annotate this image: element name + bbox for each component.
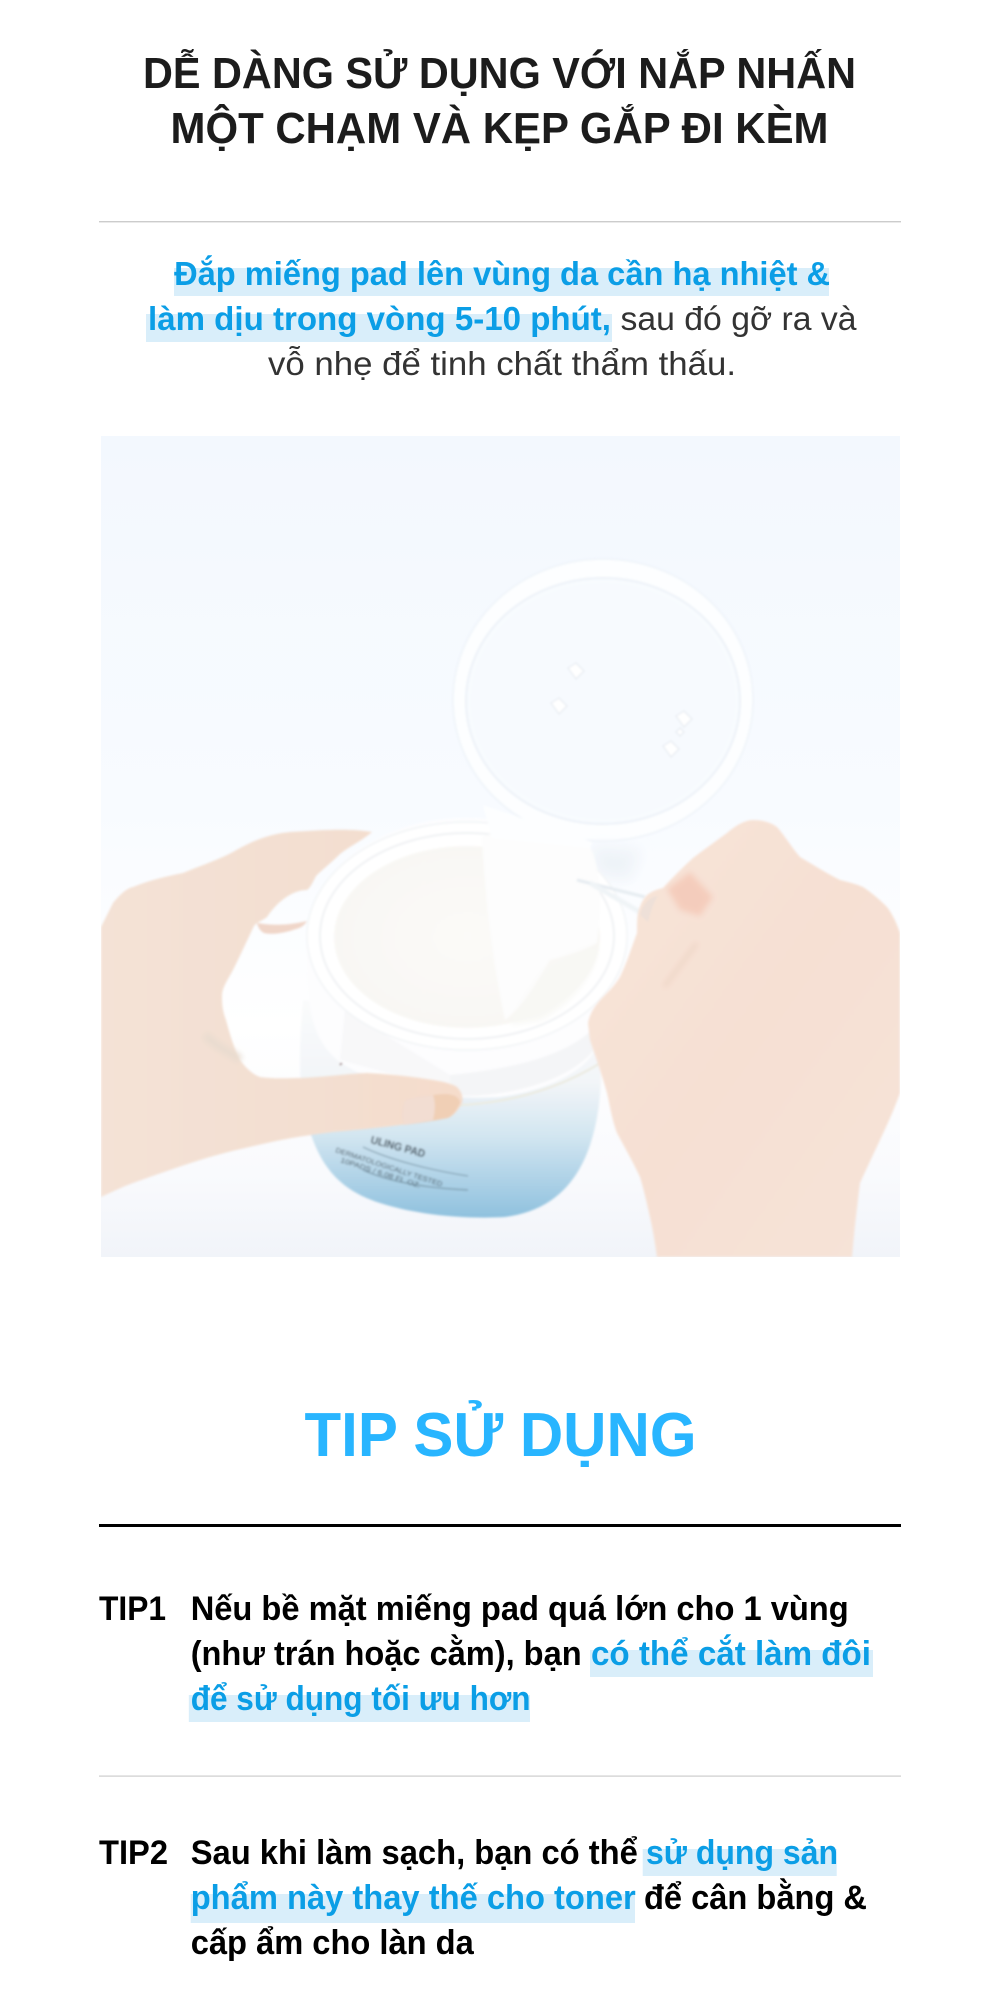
left hand <box>101 830 462 1197</box>
tip 1: có thể cắt làm đôi <box>591 1635 871 1673</box>
tip 2: phẩm này thay thế cho toner <box>191 1879 636 1917</box>
lid shadow <box>597 850 630 876</box>
product photo: hands opening jar <box>101 436 900 1257</box>
jar body <box>301 1032 600 1219</box>
jar lid <box>532 562 688 722</box>
thumb nail <box>419 1094 460 1123</box>
tip 2: TIP2 <box>99 1834 168 1872</box>
tip 2: sử dụng sản <box>646 1834 838 1872</box>
intro text block: làm dịu trong vòng 5-10 phút, <box>148 300 611 337</box>
jar label text: ULING PAD <box>369 1134 426 1160</box>
jar cap <box>332 847 604 1098</box>
cotton pad surface <box>334 846 600 1028</box>
tip 2: cấp ẩm cho làn da <box>191 1924 475 1962</box>
lid hinge <box>524 820 538 828</box>
title: MỘT CHẠM VÀ KẸP GẮP ĐI KÈM <box>170 102 828 153</box>
intro text block <box>146 255 857 382</box>
tip 1: TIP1 <box>99 1590 166 1628</box>
intro text block: sau đó gỡ ra và <box>620 300 857 337</box>
intro text block: vỗ nhẹ để tinh chất thẩm thấu. <box>268 345 736 382</box>
fingers shadow <box>667 872 713 916</box>
jar label text: DERMATOLOGICALLY TESTED <box>334 1147 443 1189</box>
tip 1: để sử dụng tối ưu hơn <box>191 1680 531 1718</box>
tweezers <box>577 880 645 912</box>
intro text block: Đắp miếng pad lên vùng da cần hạ nhiệt & <box>174 255 830 292</box>
section heading: tip: TIP SỬ DỤNG <box>304 1401 696 1470</box>
title <box>143 47 856 153</box>
jar label text: 10PADS / 6.08 FL.OZ. <box>339 1157 421 1190</box>
tip 1: (như trán hoặc cằm), bạn <box>191 1635 582 1673</box>
title: DỄ DÀNG SỬ DỤNG VỚI NẮP NHẤN <box>143 47 856 98</box>
tip 2: để cân bằng & <box>644 1879 867 1917</box>
tip 2 <box>99 1834 867 1962</box>
right hand <box>588 820 900 1257</box>
tip 1: Nếu bề mặt miếng pad quá lớn cho 1 vùng <box>191 1590 849 1628</box>
tip 2: Sau khi làm sạch, bạn có thể <box>191 1834 638 1872</box>
tip 1 <box>99 1590 873 1722</box>
jar label text <box>334 1134 443 1190</box>
lifted sheet <box>484 849 597 1016</box>
